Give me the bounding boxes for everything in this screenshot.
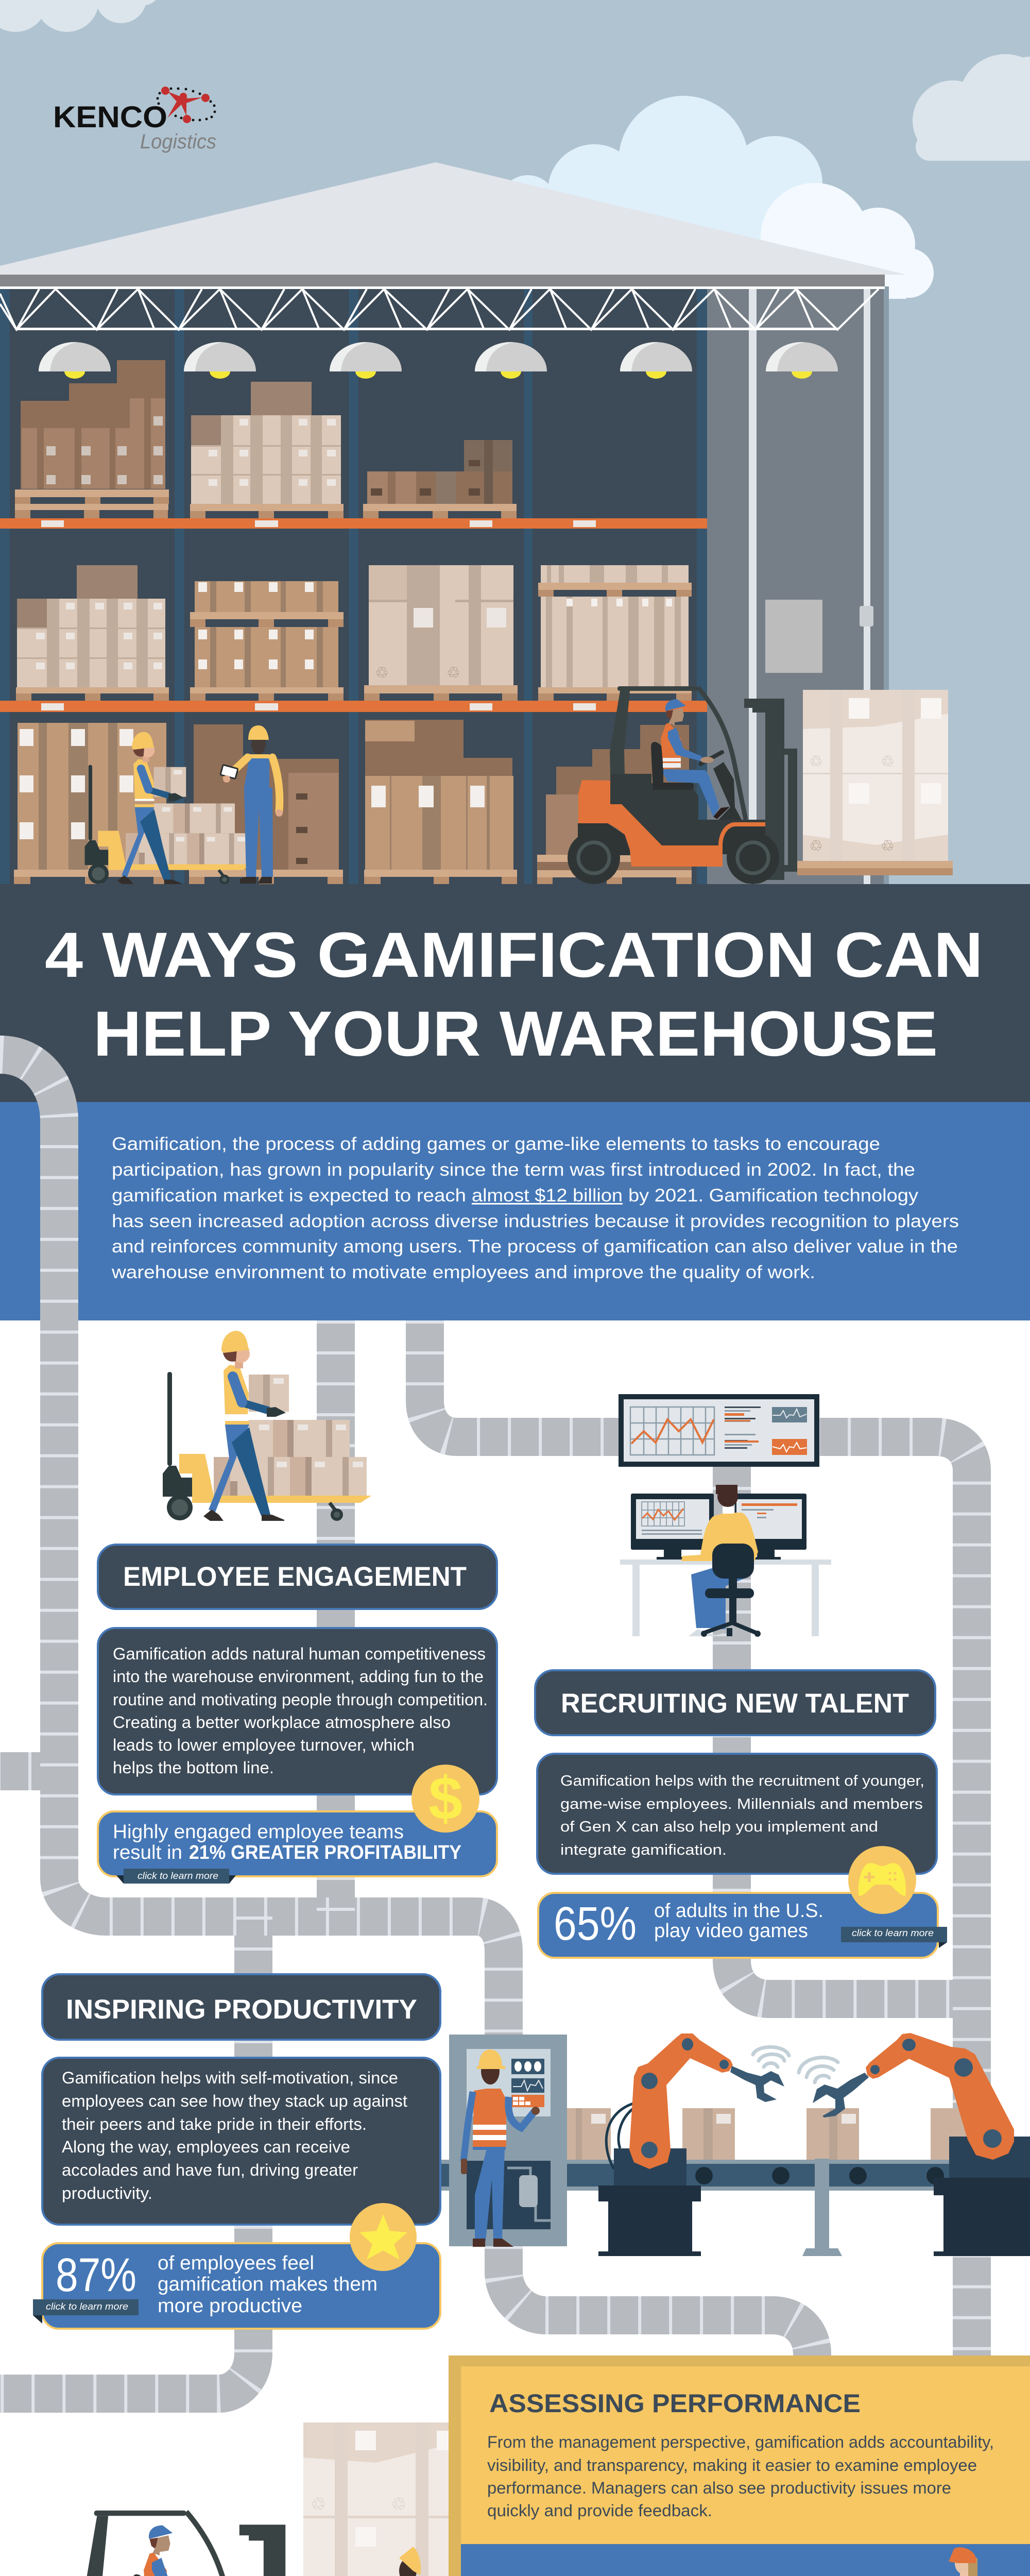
logo: KENCO	[53, 100, 167, 134]
warehouse worker with tablet	[220, 725, 283, 884]
wrapped pallet outside	[797, 690, 953, 875]
panel: inspiring body: employees can see how they stack up against	[62, 2092, 407, 2110]
worker with clipboard	[356, 2547, 432, 2576]
intro text: almost $12 billion	[472, 1185, 623, 1206]
panel: employee engagement heading	[98, 1545, 497, 1609]
intro text: and reinforces community among users. The process of gamification can also deliver value in the	[112, 1236, 958, 1257]
title text: 4 WAYS GAMIFICATION CAN	[45, 920, 983, 991]
panel: inspiring body: accolades and have fun, driving greater	[62, 2161, 358, 2179]
link ribbon: recruiting: click to learn more	[852, 1928, 934, 1938]
wrapped pallet behind truck: ♲	[311, 2495, 326, 2514]
wrapped pallet behind truck: ♲	[391, 2495, 406, 2514]
illustration: person at desk	[681, 1485, 761, 1637]
link ribbon: engagement: click to learn more	[138, 1871, 218, 1881]
cloud: behind roof white	[729, 183, 934, 317]
icon: star coin	[350, 2203, 417, 2271]
wrapped pallet behind truck	[297, 2422, 449, 2576]
illustration: control panel and worker	[449, 2035, 567, 2247]
wrapped pallet outside: ♲	[809, 838, 823, 855]
callout: 87% more productive: gamification makes them	[158, 2274, 377, 2295]
panel: recruiting body: of Gen X can also help you implement and	[560, 1819, 878, 1835]
link ribbon: recruiting	[841, 1927, 947, 1948]
panel: employee engagement body: routine and motivating people through competition.	[113, 1690, 488, 1709]
cloud: top left	[0, 0, 160, 32]
callout: 65% play video games: of adults in the U.S.	[654, 1900, 823, 1922]
icon: dollar coin: $	[428, 1765, 462, 1833]
title panel	[0, 884, 1030, 1102]
panel: inspiring body: Along the way, employees can receive	[62, 2138, 350, 2156]
cloud: top right	[913, 54, 1030, 161]
panel: employee engagement heading: EMPLOYEE ENGAGEMENT	[123, 1562, 467, 1592]
wrapped pallet outside: ♲	[809, 753, 823, 770]
callout: 87% more productive: more productive	[158, 2295, 302, 2317]
panel: employee engagement body: Creating a better workplace atmosphere also	[113, 1713, 451, 1732]
logo	[53, 87, 216, 153]
callout: 21% greater profitability: Highly engaged employee teams	[113, 1821, 404, 1843]
illustration: control room monitors	[620, 1397, 831, 1636]
intro panel	[0, 1102, 1030, 1320]
callout: 87% more productive	[42, 2243, 440, 2329]
panel: employee engagement body: helps the bottom line.	[113, 1758, 274, 1777]
panel: inspiring body	[42, 2058, 440, 2225]
callout: 21% greater profitability: 21% GREATER PROFITABILITY	[189, 1842, 461, 1863]
ceiling lamps	[39, 342, 838, 379]
callout: 65% play video games: play video games	[654, 1920, 808, 1942]
panel: inspiring body: Gamification helps with self-motivation, since	[62, 2069, 398, 2087]
callout: 87% more productive: 87%	[56, 2249, 136, 2301]
walking worker with folder	[920, 2547, 1010, 2576]
sky background	[0, 0, 1030, 884]
intro text: Gamification, the process of adding games or game-like elements to tasks to encourage	[112, 1134, 880, 1154]
forklift: lower scene	[37, 2511, 300, 2576]
forklift in warehouse	[568, 686, 797, 884]
panel: employee engagement body	[98, 1628, 497, 1794]
shelf 1 boxes	[15, 360, 517, 518]
panel: inspiring heading	[42, 1974, 440, 2040]
roof truss	[0, 289, 879, 330]
wrapped pallet outside: ♲	[881, 838, 895, 855]
wrapped pallet outside: ♲	[881, 753, 895, 770]
callout: 21% greater profitability	[98, 1811, 497, 1876]
panel: recruiting body: integrate gamification.	[560, 1842, 727, 1858]
floor level boxes	[14, 720, 692, 884]
shelf 2 boxes	[16, 565, 692, 701]
panel: employee engagement body: Gamification adds natural human competitiveness	[113, 1645, 486, 1663]
panel: recruiting body: game-wise employees. Millennials and members	[560, 1796, 923, 1812]
panel: employee engagement body: into the warehouse environment, adding fun to the	[113, 1667, 484, 1686]
warehouse building	[0, 286, 889, 884]
shelf 2 boxes: ♲	[375, 665, 389, 682]
callout: 87% more productive: of employees feel	[158, 2252, 314, 2274]
cloud: behind roof light blue	[500, 96, 822, 268]
callout: 65% play video games: 65%	[554, 1897, 637, 1950]
link ribbon: productivity: click to learn more	[46, 2301, 128, 2312]
title text	[45, 920, 983, 1070]
panel: inspiring body: productivity.	[62, 2184, 152, 2202]
intro text: has seen increased adoption across diverse industries because it provides recognition to players	[112, 1211, 959, 1231]
hand truck worker in warehouse	[85, 732, 252, 885]
illustration: conveyor with robot arms	[379, 2033, 1030, 2256]
intro text: warehouse environment to motivate employees and improve the quality of work.	[111, 1262, 815, 1282]
intro text: participation, has grown in popularity since the term was first introduced in 2002. In fact, the	[112, 1160, 915, 1180]
title text: HELP YOUR WAREHOUSE	[93, 998, 938, 1070]
logo: Logistics	[140, 130, 216, 153]
panel: recruiting body: Gamification helps with the recruitment of younger,	[560, 1773, 924, 1789]
text: assessing performance: performance. Managers can also see productivity issues more	[487, 2479, 951, 2497]
panel: recruiting heading: RECRUITING NEW TALENT	[561, 1688, 909, 1719]
intro text	[111, 1134, 959, 1282]
text: assessing performance: visibility, and transparency, making it easier to examine employee	[487, 2456, 977, 2475]
link ribbon: engagement	[116, 1869, 236, 1884]
link ribbon: productivity	[33, 2299, 139, 2324]
intro text: by 2021. Gamification technology	[628, 1185, 919, 1206]
intro text: gamification market is expected to reach	[112, 1185, 466, 1206]
callout: 65% play video games	[538, 1893, 938, 1958]
callout: 21% greater profitability: result in	[113, 1842, 182, 1863]
text: assessing performance: quickly and provide feedback.	[487, 2501, 712, 2520]
icon: dollar coin	[411, 1765, 479, 1833]
panel: employee engagement body: leads to lower employee turnover, which	[113, 1736, 415, 1754]
text: assessing performance	[487, 2433, 994, 2520]
illustration: worker with pallet jack	[163, 1331, 371, 1521]
conveyor path network	[0, 1055, 972, 2576]
heading: assessing performance: ASSESSING PERFORMANCE	[489, 2389, 861, 2418]
text: assessing performance: From the management perspective, gamification adds accountability,	[487, 2433, 994, 2451]
panel: recruiting heading	[535, 1670, 935, 1735]
panel: inspiring heading: INSPIRING PRODUCTIVITY	[66, 1994, 417, 2025]
truck body	[449, 2355, 1030, 2576]
roof	[0, 162, 906, 289]
panel: inspiring body: their peers and take pride in their efforts.	[62, 2115, 367, 2133]
shelf 2 boxes: ♲	[447, 665, 460, 682]
icon: game controller coin	[848, 1846, 916, 1914]
panel: recruiting body	[537, 1754, 937, 1874]
shelf beams	[0, 518, 707, 712]
